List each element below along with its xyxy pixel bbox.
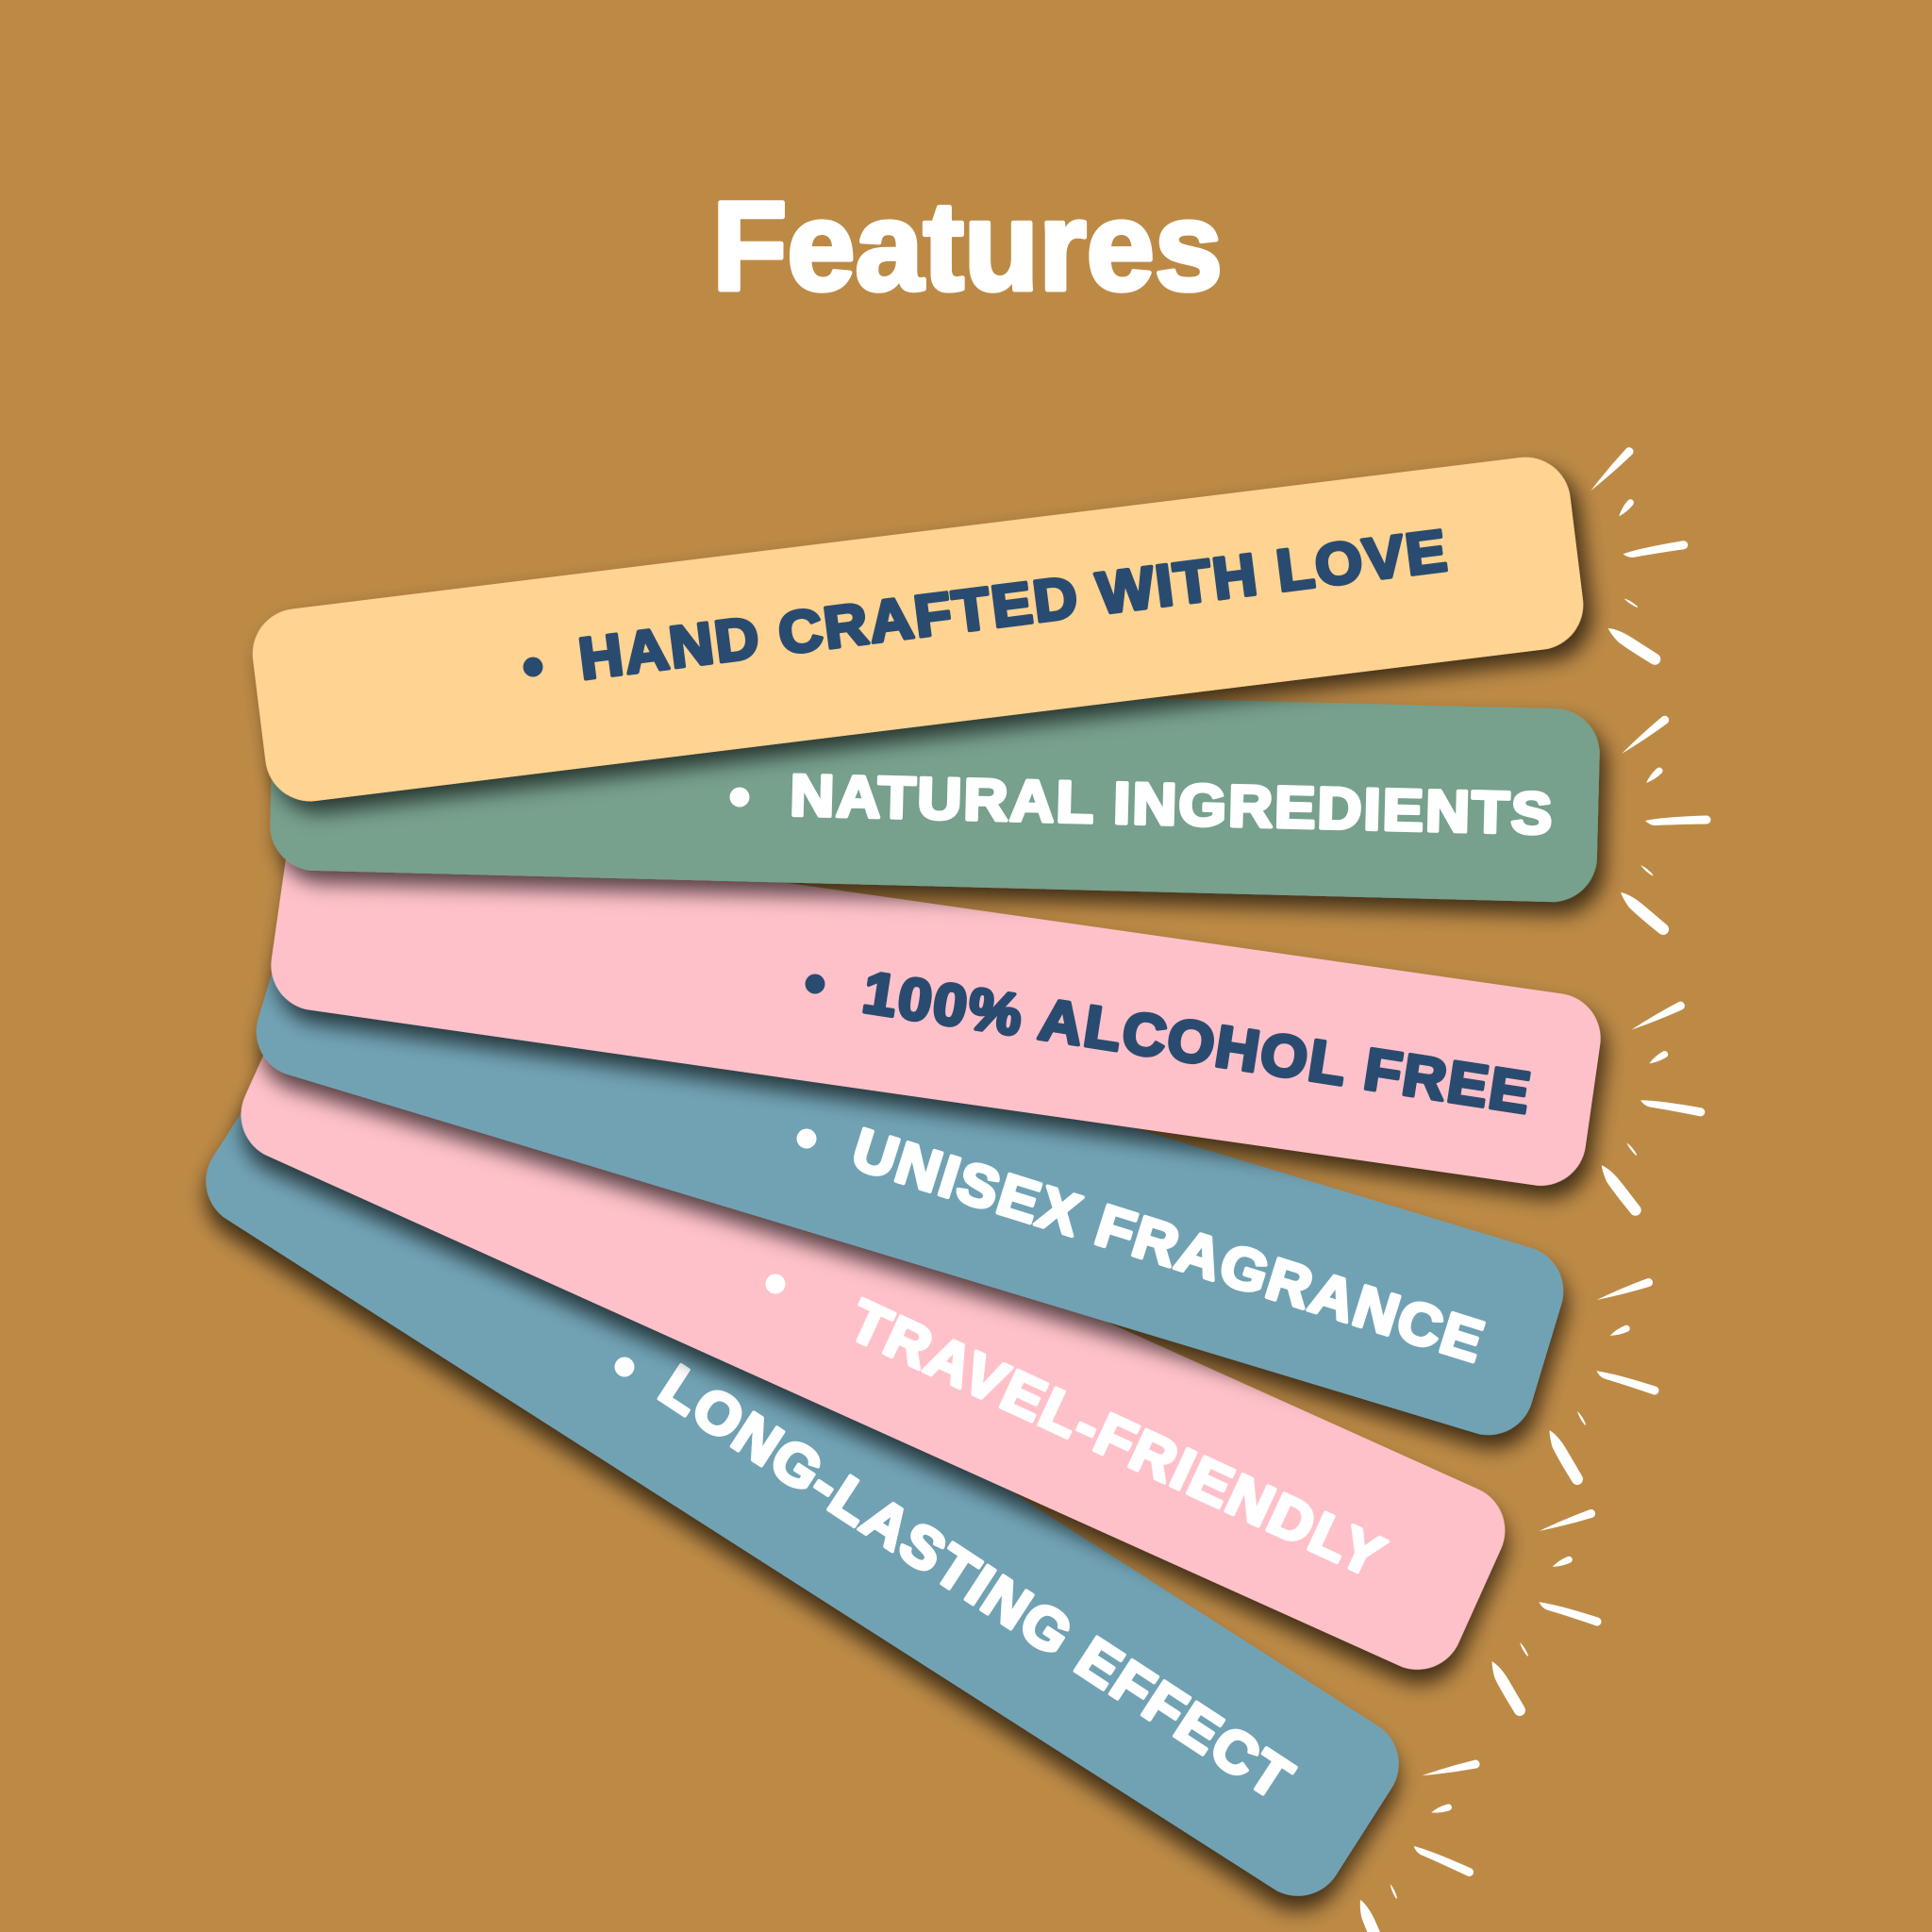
label: 100% ALCOHOL FREE	[858, 960, 1536, 1126]
bullet	[615, 1357, 634, 1377]
icon: sparks travel card	[1477, 1495, 1636, 1731]
title: Features	[712, 176, 1223, 317]
card	[226, 961, 1520, 1684]
card	[269, 676, 1601, 903]
card	[245, 876, 1574, 1446]
card	[189, 1032, 1416, 1913]
bullet	[523, 657, 543, 677]
icon: sparks bottom card	[1341, 1741, 1519, 1932]
bullet	[730, 787, 749, 808]
label: LONG-LASTING EFFECT	[648, 1353, 1305, 1813]
label: NATURAL INGREDIENTS	[790, 763, 1555, 847]
icon: sparks blue card	[1535, 1264, 1693, 1500]
panel: long-lasting effect	[189, 1032, 1416, 1913]
icon: sparks pink card	[1592, 992, 1726, 1225]
panel: natural ingredients	[269, 676, 1601, 903]
label: HAND CRAFTED WITH LOVE	[575, 518, 1452, 692]
panel: alcohol free	[265, 812, 1607, 1191]
label: UNISEX FRAGRANCE	[844, 1117, 1492, 1375]
card	[265, 812, 1607, 1191]
bullet	[796, 1128, 817, 1149]
bullet	[766, 1274, 785, 1294]
card	[247, 452, 1589, 807]
icon: sparks green card	[1621, 716, 1710, 935]
bullet	[806, 974, 824, 994]
panel: unisex fragrance	[245, 876, 1574, 1446]
icon: sparks top card	[1585, 441, 1703, 671]
panel: travel-friendly	[226, 961, 1520, 1684]
panel: hand crafted	[247, 452, 1589, 807]
label: TRAVEL-FRIENDLY	[840, 1288, 1395, 1591]
